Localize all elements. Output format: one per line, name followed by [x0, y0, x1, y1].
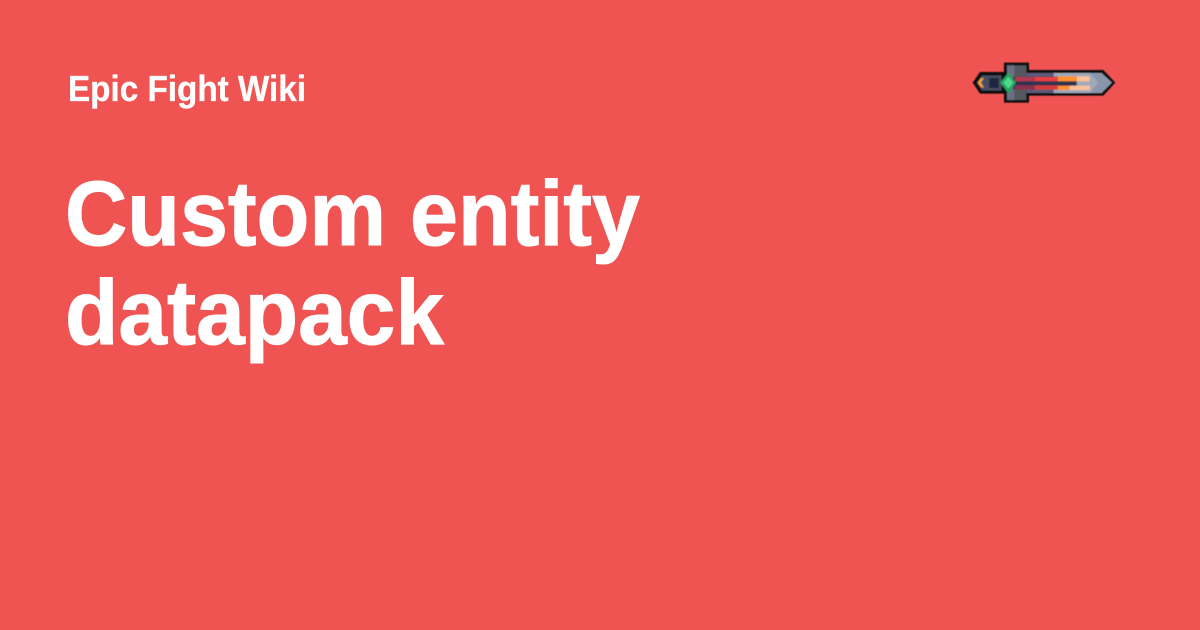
- site name: Epic Fight Wiki: [68, 68, 306, 109]
- icon: sword: [973, 63, 1115, 103]
- title: Custom entity: [65, 163, 640, 265]
- title: [65, 163, 640, 364]
- title: datapack: [65, 262, 445, 364]
